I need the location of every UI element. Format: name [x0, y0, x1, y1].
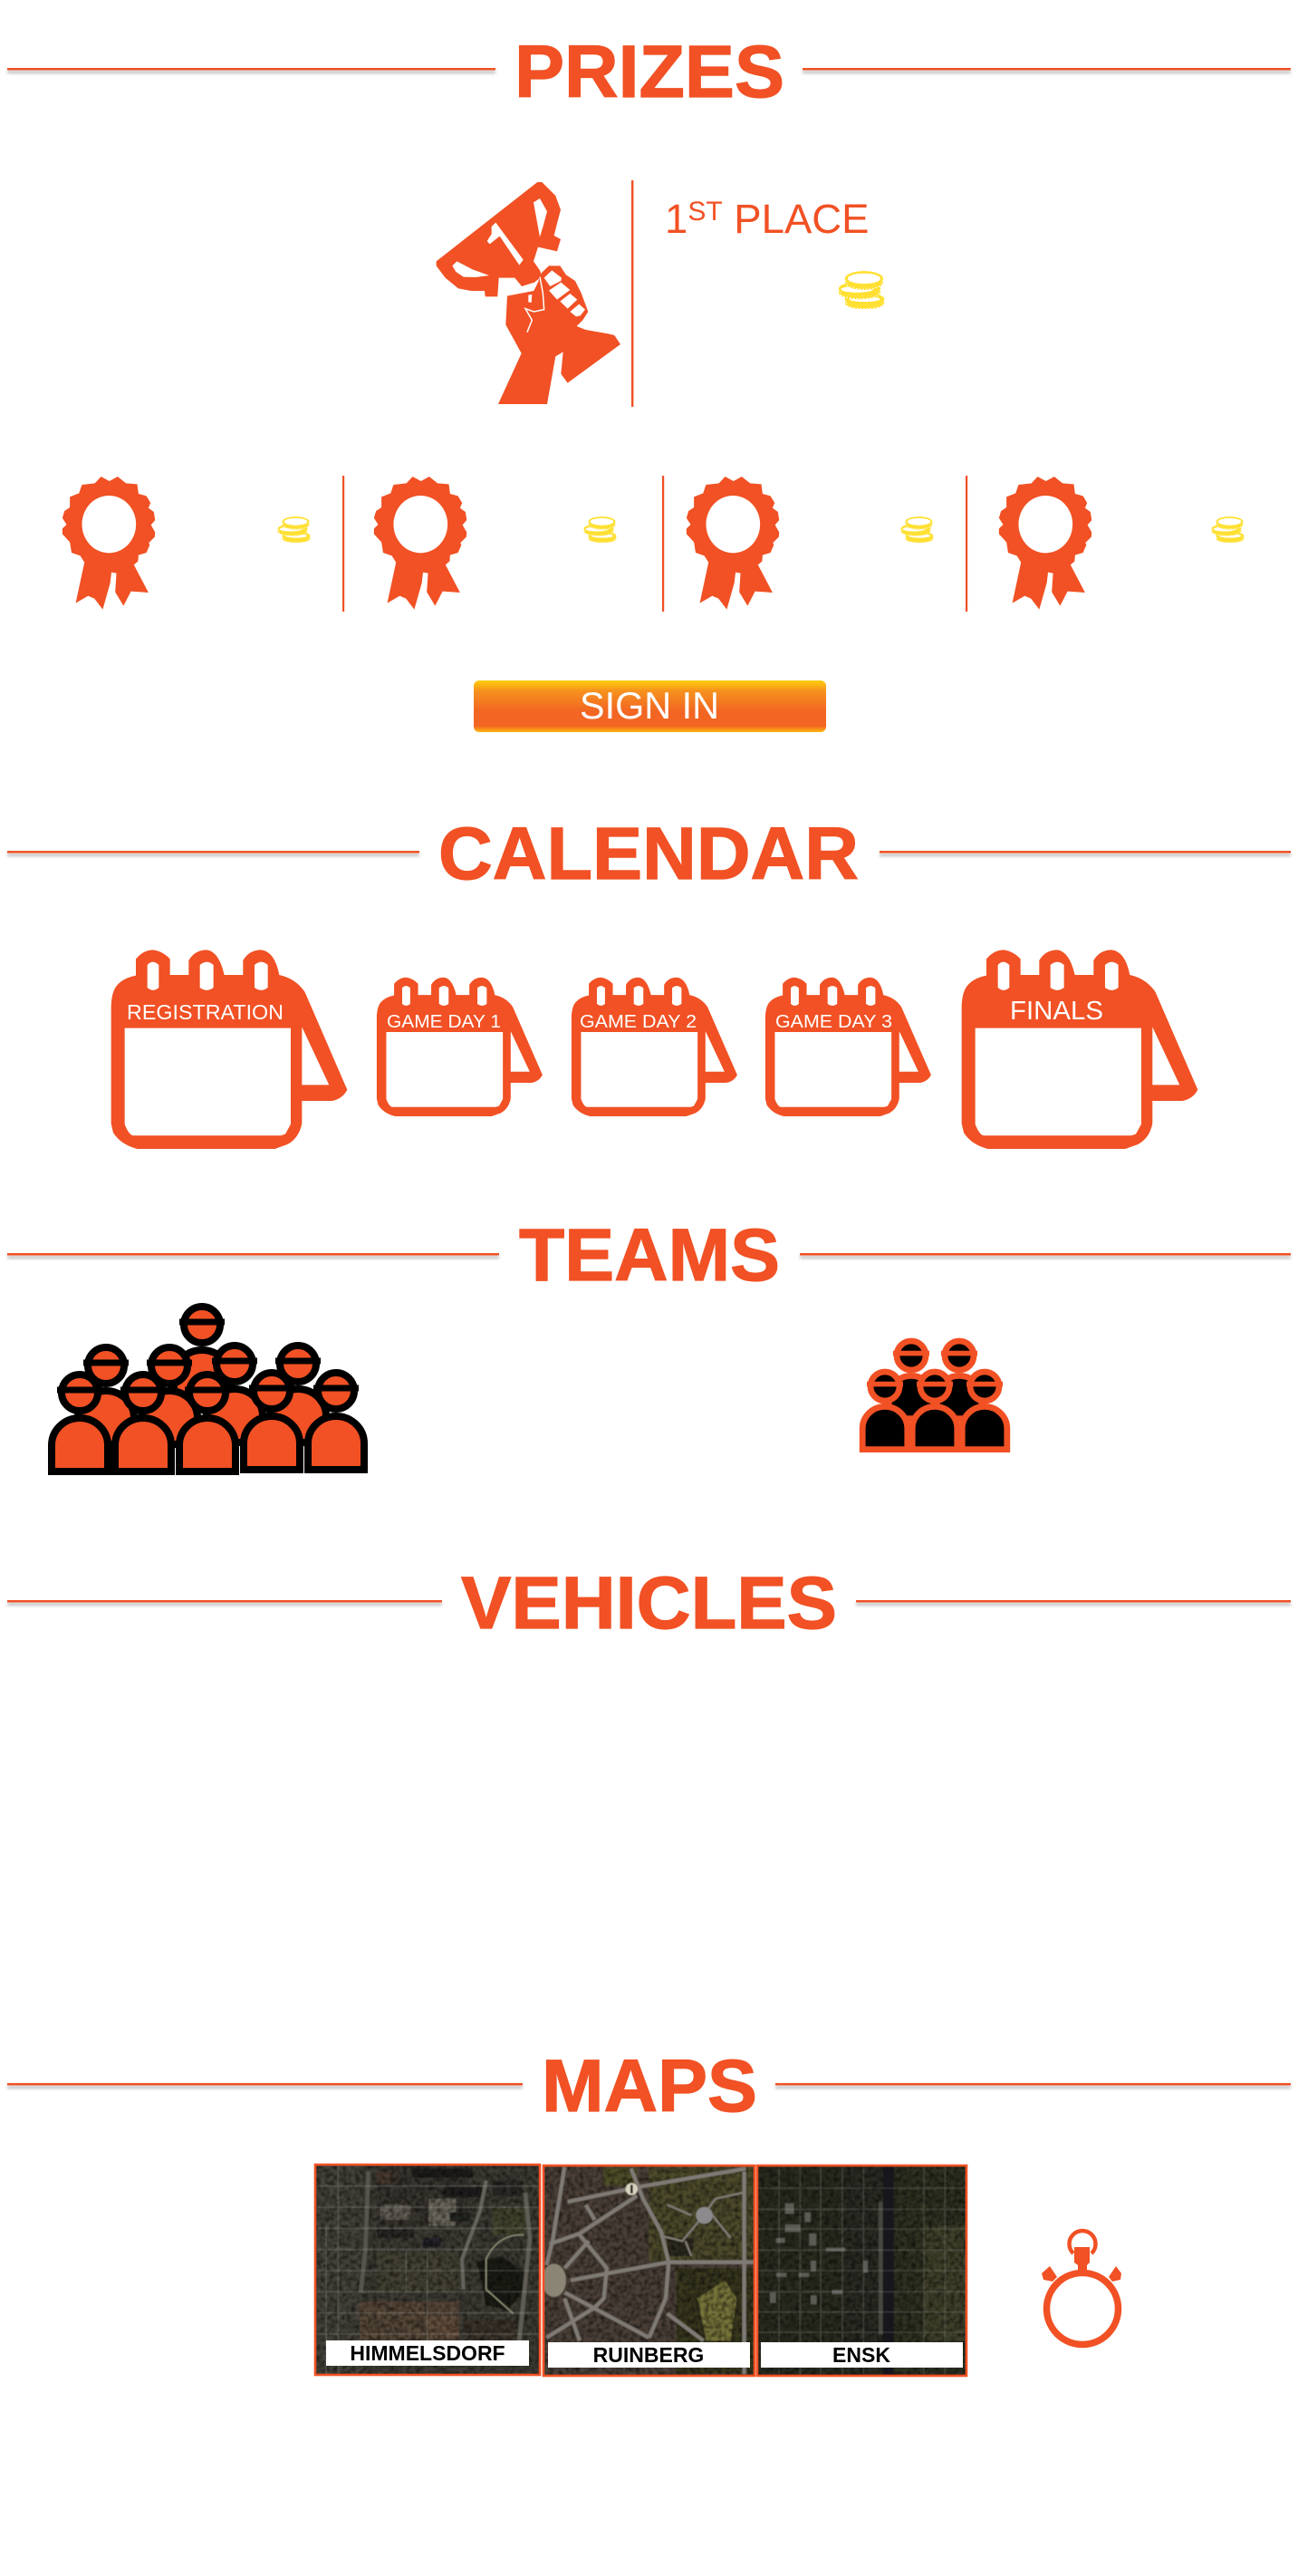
icon: ribbon 2 — [374, 477, 466, 610]
heading: PRIZES — [7, 31, 1291, 113]
panel: map Ruinberg: RUINBERG — [593, 2343, 704, 2367]
icon: small team group — [862, 1341, 1007, 1450]
heading: TEAMS — [7, 1214, 1291, 1297]
icon: ribbon 1 — [62, 477, 155, 610]
icon: registration calendar — [111, 950, 347, 1149]
panel: calendar dates — [111, 950, 1197, 1149]
icon: game day 3 calendar: GAME DAY 3 — [775, 1012, 892, 1032]
panel: map Ruinberg — [542, 2166, 755, 2376]
icon: coins 3 — [900, 516, 933, 543]
text: 1st place: 1 — [665, 196, 687, 242]
icon: trophy held in a hand — [437, 182, 620, 404]
icon: finals calendar: FINALS — [1010, 997, 1103, 1026]
heading: MAPS: MAPS — [542, 2045, 757, 2127]
icon: game day 1 calendar: GAME DAY 1 — [387, 1012, 501, 1032]
panel: map Himmelsdorf: HIMMELSDORF — [350, 2341, 505, 2365]
icon: game day 1 calendar — [377, 978, 543, 1116]
icon: coins, first place — [839, 271, 884, 309]
button: sign in: SIGN IN — [580, 684, 719, 727]
heading: CALENDAR: CALENDAR — [438, 813, 859, 895]
text: 1st place: PLACE — [723, 196, 870, 242]
panel: runner-up prizes — [62, 476, 1245, 612]
icon: game day 2 calendar: GAME DAY 2 — [580, 1012, 697, 1032]
heading: PRIZES: PRIZES — [514, 31, 784, 113]
text: 1st place: ST — [687, 197, 723, 227]
divider: first place — [631, 180, 633, 407]
icon: coins 1 — [277, 516, 310, 543]
icon: stopwatch — [1042, 2231, 1121, 2345]
panel: map Ensk — [757, 2166, 966, 2376]
panel: map Himmelsdorf — [315, 2165, 540, 2375]
icon: ribbon 4 — [999, 477, 1091, 610]
icon: registration calendar: REGISTRATION — [127, 1000, 284, 1024]
icon: game day 2 calendar — [572, 978, 737, 1116]
icon: large team group — [52, 1307, 364, 1471]
icon: ribbon 3 — [687, 477, 779, 610]
icon: coins 2 — [583, 516, 616, 543]
heading: CALENDAR — [7, 813, 1291, 895]
heading: VEHICLES: VEHICLES — [461, 1562, 837, 1645]
button: sign in — [474, 680, 826, 732]
icon: finals calendar — [962, 950, 1197, 1149]
heading: TEAMS: TEAMS — [519, 1214, 780, 1297]
heading: VEHICLES — [7, 1562, 1291, 1645]
heading: MAPS — [7, 2045, 1291, 2127]
icon: coins 4 — [1212, 516, 1245, 543]
icon: game day 3 calendar — [765, 978, 931, 1116]
panel: map Ensk: ENSK — [832, 2343, 890, 2367]
